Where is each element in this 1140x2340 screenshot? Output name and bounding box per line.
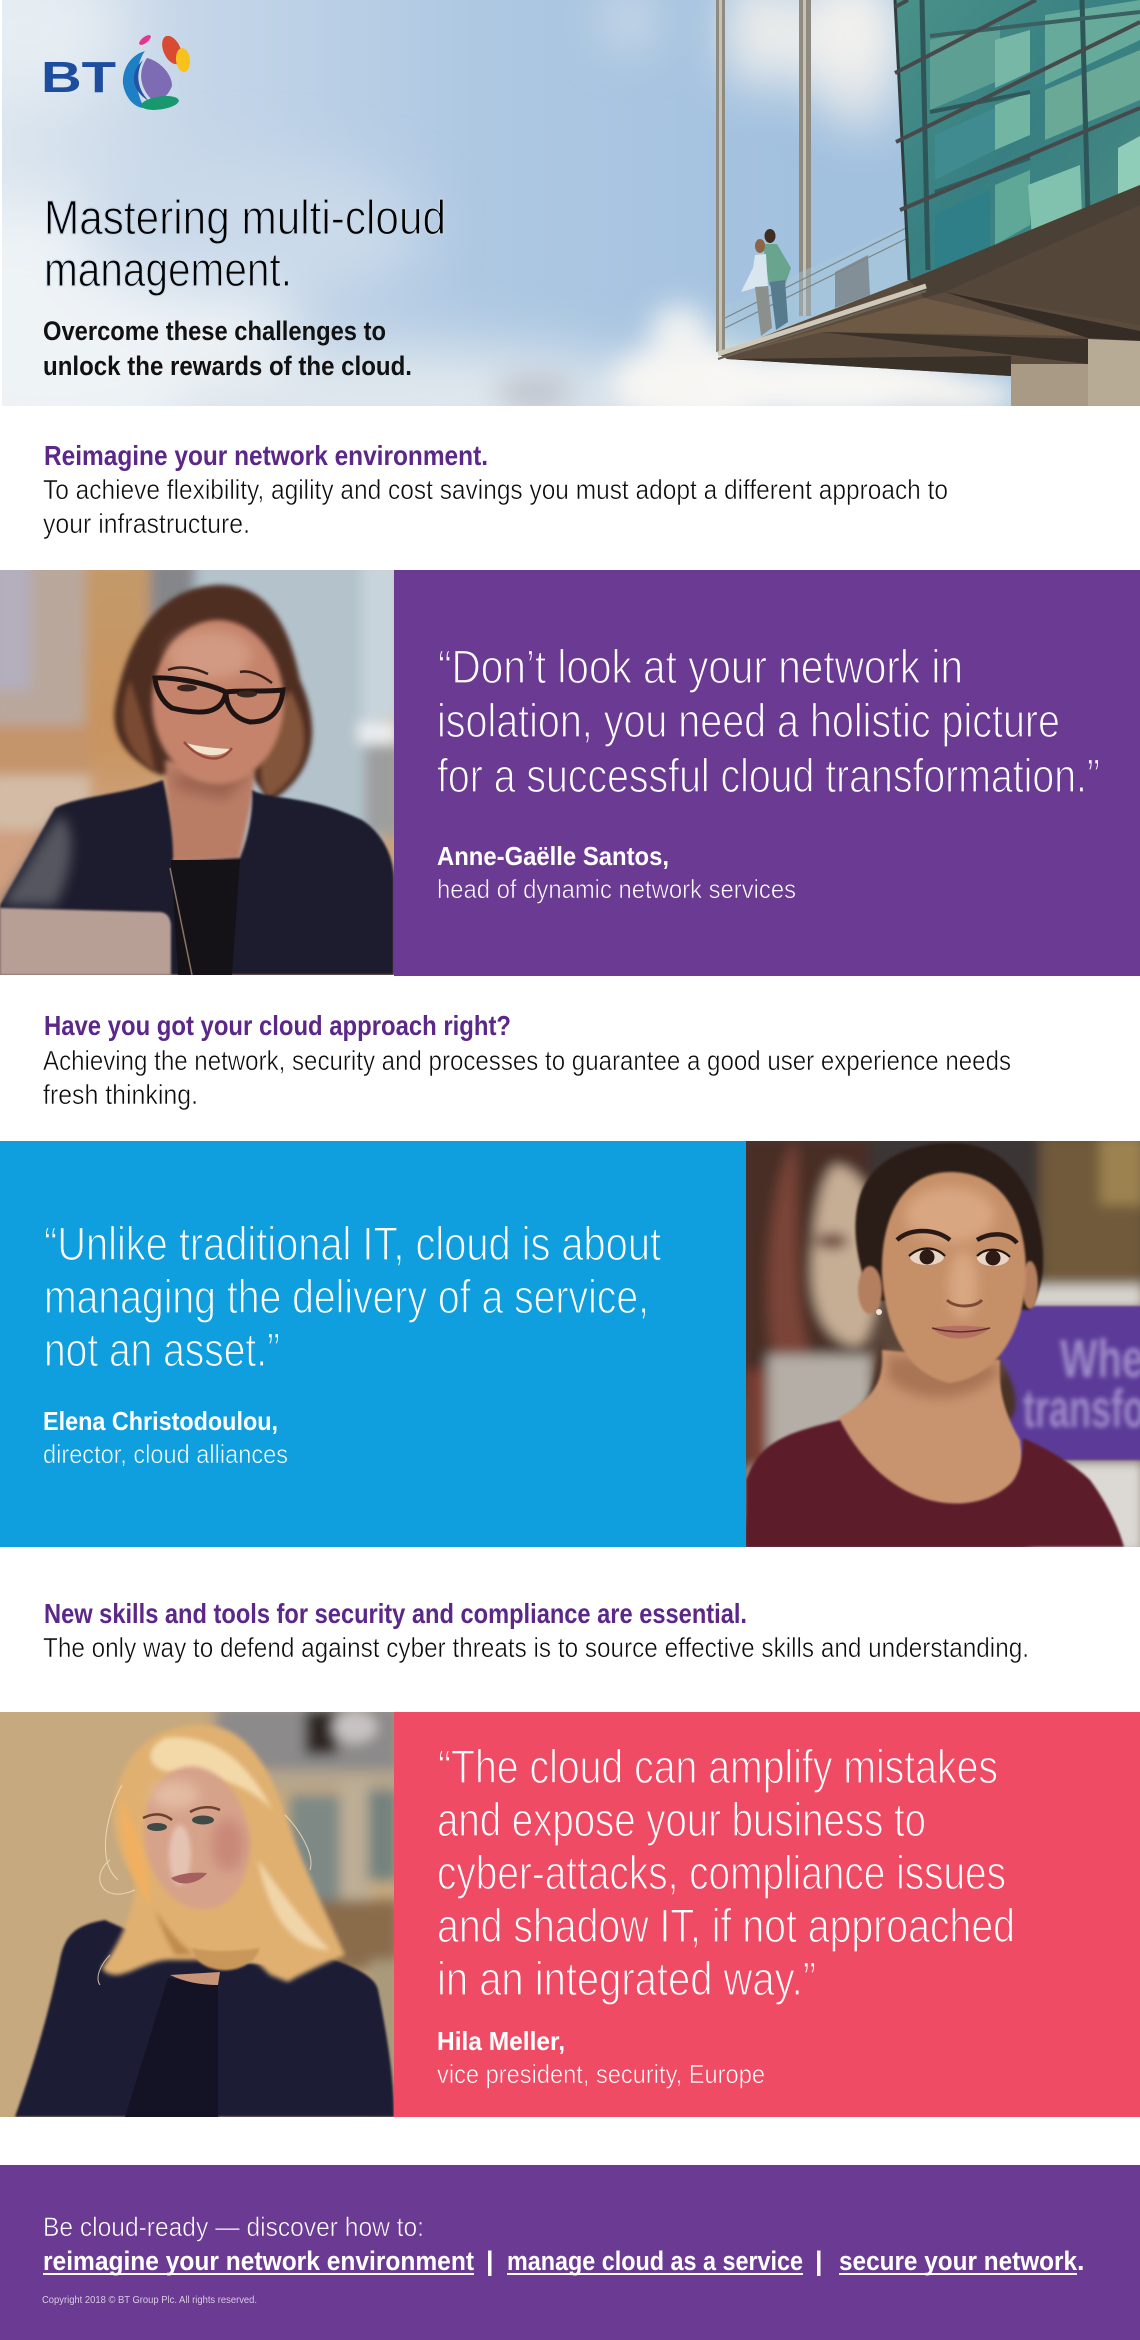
quote: “The cloud can amplify mistakes [438, 1740, 998, 1793]
face [882, 1172, 1026, 1383]
panel: quote Elena Christodoulou [0, 1141, 746, 1547]
title: management. [44, 244, 292, 297]
quote: “Don’t look at your network in [438, 640, 963, 693]
jacket [15, 1920, 394, 2117]
quote: “Unlike traditional IT, cloud is about [44, 1217, 661, 1270]
attribution: Hila Meller, [437, 2026, 565, 2056]
footer links: . [1077, 2246, 1085, 2276]
text block: reimagine your network environment: To achieve flexibility, agility and cost savings you must adopt a different approach to [43, 474, 948, 505]
icon: couple on balcony [741, 229, 791, 336]
photo: Elena Christodoulou [740, 1135, 1140, 1555]
quote [437, 1740, 1015, 2005]
text block: cloud approach: fresh thinking. [43, 1079, 198, 1110]
footer links: | [815, 2246, 823, 2276]
eyes and brows [143, 1807, 220, 1820]
attribution: Elena Christodoulou, [43, 1406, 278, 1436]
text block: skills and tools [43, 1598, 1029, 1663]
footer links [43, 2246, 1085, 2276]
nose and lips [947, 1300, 982, 1306]
call to action: Be cloud-ready — discover how to: [43, 2212, 424, 2242]
icon: BT globe [123, 33, 191, 112]
mullions [716, 0, 725, 352]
attribution: director, cloud alliances [43, 1439, 288, 1469]
face [152, 620, 284, 784]
title [44, 192, 446, 297]
title: Mastering multi-cloud [44, 192, 446, 245]
subtitle: unlock the rewards of the cloud. [43, 351, 412, 381]
footer links: secure your network [839, 2246, 1078, 2276]
logo: BT: BT [41, 53, 116, 102]
neck and chest [165, 760, 255, 862]
panel: quote Hila Meller [394, 1712, 1140, 2117]
copyright: Copyright 2018 © BT Group Plc. All rights reserved. [42, 2294, 257, 2306]
subtitle [43, 316, 412, 381]
jacket [0, 780, 394, 975]
quote: managing the delivery of a service, [44, 1270, 649, 1323]
lips [171, 1873, 207, 1883]
maroon top [746, 1420, 1124, 1547]
quote [44, 1217, 661, 1376]
purple sign [1000, 1306, 1140, 1460]
neck [170, 1972, 220, 1985]
footer links: reimagine your network environment [43, 2246, 474, 2276]
hero photo: sky and building [2, 0, 1140, 406]
footer links: manage cloud as a service [507, 2246, 803, 2276]
hair [102, 1725, 345, 1982]
gold collar [192, 1948, 260, 1970]
face [144, 1764, 250, 1910]
text block: reimagine your network environment [43, 440, 948, 539]
text block: cloud approach [43, 1010, 1011, 1110]
panel: hero [2, 0, 1140, 406]
text block: reimagine your network environment: your infrastructure. [43, 508, 250, 539]
laptop [0, 908, 171, 975]
attribution [437, 841, 796, 904]
quote [437, 640, 1100, 802]
slab underside [720, 185, 1140, 376]
text block: skills and tools: New skills and tools for security and compliance are essential. [44, 1598, 747, 1629]
text block: cloud approach: Achieving the network, security and processes to guarantee a good user experience needs [43, 1045, 1011, 1076]
glass balustrade and deck furniture [725, 268, 811, 349]
text block: cloud approach: Have you got your cloud approach right? [44, 1010, 511, 1041]
attribution: vice president, security, Europe [437, 2059, 765, 2089]
footer links: | [486, 2246, 494, 2276]
facade glass [895, 0, 1140, 280]
ears [858, 1266, 882, 1314]
quote: cyber-attacks, compliance issues [437, 1846, 1006, 1899]
subtitle: Overcome these challenges to [43, 316, 386, 346]
attribution: Anne-Gaëlle Santos, [437, 841, 669, 871]
quote: in an integrated way.” [437, 1952, 816, 2005]
text block: reimagine your network environment: Reimagine your network environment. [44, 440, 488, 471]
attribution [43, 1406, 288, 1469]
facade frames [895, 0, 1140, 280]
photo: Anne-Gaëlle Santos [0, 560, 402, 975]
attribution [437, 2026, 765, 2089]
hair [114, 585, 312, 802]
smile [186, 743, 230, 755]
quote: not an asset.” [44, 1323, 280, 1376]
panel: footer [0, 2165, 1140, 2340]
quote: and shadow IT, if not approached [437, 1899, 1015, 1952]
concrete column [1011, 364, 1088, 406]
eyes and brows [897, 1231, 950, 1240]
panel: quote Anne-Gaëlle Santos [394, 570, 1140, 976]
hair [855, 1143, 1043, 1310]
quote: and expose your business to [437, 1793, 926, 1846]
glasses [155, 678, 283, 722]
neck and chest [838, 1350, 1023, 1508]
attribution: head of dynamic network services [437, 874, 796, 904]
photo: Hila Meller [0, 1705, 400, 2125]
logo: BT [41, 33, 191, 112]
hair strands [98, 1785, 311, 1985]
